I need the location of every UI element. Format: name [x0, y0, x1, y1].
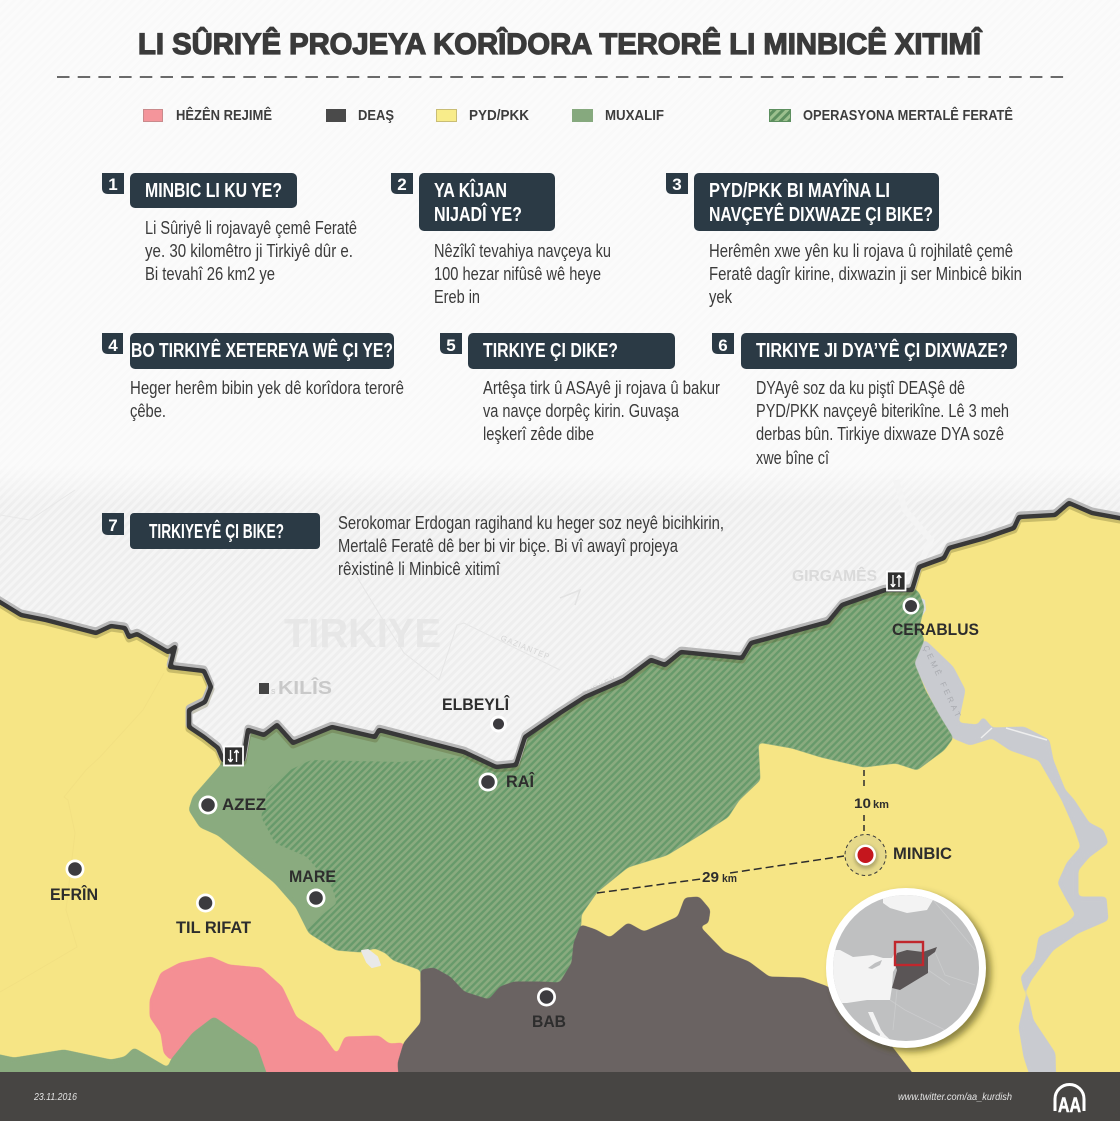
- lake patch: [362, 950, 380, 967]
- legend: PYD/PKK: PYD/PKK: [469, 107, 529, 124]
- number badge 3: 3: [672, 175, 682, 194]
- text 3: yek: [709, 287, 733, 307]
- number badge 7: 7: [108, 516, 118, 535]
- text 6: [756, 378, 1009, 468]
- Turkey road label: TURKEY: [581, 674, 618, 699]
- text 7: Mertalê Feratê dê ber bi vir biçe. Bi vî awayî projeya: [338, 536, 679, 556]
- date: 23.11.2016: [33, 1092, 77, 1103]
- panel: question 5: [440, 333, 720, 444]
- panel: question 4: [102, 333, 404, 421]
- city: Elbeylî: [442, 695, 510, 732]
- text 5: Artêşa tirk û ASAyê ji rojava û bakur: [483, 378, 720, 398]
- icon: border crossing east: [887, 572, 906, 590]
- number badge 2: 2: [397, 175, 407, 194]
- distance: 29 km: [597, 856, 844, 893]
- heading 6: TIRKIYE JI DYA’YÊ ÇI DIXWAZE?: [756, 338, 1008, 362]
- city: Minbic marker: [845, 834, 952, 876]
- faint roads in Turkey: [2, 490, 581, 679]
- Girgamês label: GIRGAMÊS: [792, 566, 877, 585]
- number badge 1: [102, 173, 124, 194]
- distance: 10 km: 10: [854, 795, 871, 811]
- text 6: xwe bîne cî: [756, 448, 830, 468]
- text 3: Herêmên xwe yên ku li rojava û rojhilatê çemê: [709, 241, 1013, 261]
- number badge 3: [666, 173, 688, 194]
- heading 1: [130, 173, 297, 208]
- panel: question 1: [102, 173, 357, 284]
- text 1: ye. 30 kilomêtro ji Tirkiyê dûr e.: [145, 241, 353, 261]
- Kilis label: [259, 677, 332, 694]
- city: Efrîn: EFRÎN: [50, 885, 98, 904]
- icon: border crossing west: [224, 746, 243, 766]
- city: Cerablus: CERABLUS: [892, 620, 979, 639]
- map: [0, 490, 1120, 1072]
- logo: AA: [1055, 1084, 1084, 1117]
- number badge 1: 1: [108, 175, 118, 194]
- text 4: çêbe.: [130, 401, 166, 421]
- distance: 29 km: 29: [702, 869, 719, 886]
- city: Mare: [290, 870, 336, 908]
- heading 4: [130, 333, 394, 369]
- territory: DEAŞ: [398, 896, 912, 1072]
- legend: regime forces: HÊZÊN REJIMÊ: [176, 106, 272, 124]
- inset red locator box: [895, 942, 923, 965]
- territory: opposition green: [189, 587, 953, 1003]
- Kilis label: KILÎS: [278, 677, 332, 698]
- text 1: Li Sûriyê li rojavayê çemê Feratê: [145, 218, 357, 238]
- text 5: [483, 378, 720, 444]
- logo: AA: AA: [1058, 1094, 1081, 1117]
- distance: 10 km: km: [873, 799, 889, 811]
- panel: question 7: [102, 513, 724, 579]
- territory: opposition southwest: [0, 1018, 266, 1072]
- distance: 10 km: [854, 770, 889, 833]
- heading 5: [468, 333, 675, 369]
- heading 2: NIJADÎ YE?: [434, 202, 522, 226]
- number badge 4: 4: [108, 336, 118, 355]
- legend: [144, 106, 1013, 124]
- inset seas: [833, 895, 933, 1039]
- legend: regime forces: [144, 106, 272, 124]
- Turkey label: TIRKIYE: [284, 610, 441, 656]
- heading 1: MINBIC LI KU YE?: [145, 180, 282, 202]
- city: Til Rifat: TIL RIFAT: [176, 918, 252, 937]
- text 6: derbas bûn. Tirkiye dixwaze DYA sozê: [756, 424, 1004, 444]
- text 5: va navçe dorpêç kirin. Guvaşa: [483, 401, 680, 421]
- city: Til Rifat: [176, 894, 252, 937]
- legend: Euphrates Shield operation: OPERASYONA MERTALÊ FERATÊ: [803, 106, 1013, 124]
- legend: DEAŞ: DEAŞ: [358, 107, 394, 124]
- locator map inset: [825, 885, 991, 1052]
- number badge 7: [102, 513, 124, 535]
- city: Mare: MARE: [289, 867, 336, 886]
- text 3: Feratê dagîr kirine, dixwazin ji ser Minbicê bikin: [709, 264, 1022, 284]
- text 7: rêxistinê li Minbicê xitimî: [338, 559, 501, 579]
- heading 2: YA KÎJAN: [434, 178, 507, 202]
- text 4: Heger herêm bibin yek dê korîdora terorê: [130, 378, 404, 398]
- heading 5: TIRKIYE ÇI DIKE?: [483, 340, 618, 362]
- panel: question 2: [391, 173, 611, 307]
- distance: 29 km: km: [722, 873, 737, 885]
- heading 7: [130, 513, 320, 549]
- faint tracks on yellow: [0, 673, 164, 992]
- city: Elbeylî: ELBEYLÎ: [442, 695, 510, 714]
- territory: Euphrates river: [914, 597, 1108, 1090]
- title: LI SÛRIYÊ PROJEYA KORÎDORA TERORÊ LI MINBICÊ XITIMÎ: [138, 27, 983, 61]
- city: Raî: [478, 772, 535, 792]
- inset faint borders: [890, 900, 975, 1040]
- twitter link: www.twitter.com/aa_kurdish: [898, 1092, 1012, 1103]
- text 6: PYD/PKK navçeyê biterikîne. Lê 3 meh: [756, 401, 1009, 421]
- text 2: Nêzîkî tevahiya navçeya ku: [434, 241, 611, 261]
- territory: PYD/PKK yellow: [0, 503, 1120, 1072]
- heading 7: TIRKIYEYÊ ÇI BIKE?: [149, 519, 284, 543]
- Gaziantep road label: GAZIANTEP: [499, 634, 551, 662]
- heading 3: [694, 173, 939, 231]
- Kilis label: s: [271, 686, 276, 696]
- panel: question 6: [712, 333, 1017, 468]
- text 4: [130, 378, 404, 421]
- heading 4: BO TIRKIYÊ XETEREYA WÊ ÇI YE?: [131, 338, 393, 362]
- number badge 6: [712, 333, 734, 355]
- heading 2: [419, 173, 555, 231]
- city: Efrîn: [51, 860, 97, 900]
- legend: opposition: [572, 107, 664, 124]
- heading 6: [741, 333, 1017, 369]
- city: Azez: [198, 795, 266, 814]
- number badge 5: [440, 333, 462, 355]
- footer: [0, 1072, 1120, 1121]
- text 1: Bi tevahî 26 km2 ye: [145, 264, 275, 284]
- river label: ÇEMÊ FERAT: [921, 644, 964, 721]
- text 1: [145, 218, 357, 284]
- text 7: Serokomar Erdogan ragihand ku heger soz neyê bicihkirin,: [338, 513, 724, 533]
- number badge 6: 6: [718, 336, 728, 355]
- text 7: [338, 513, 724, 579]
- border of Turkey and Syria: [0, 501, 1120, 769]
- city: Minbic marker: MINBIC: [893, 844, 952, 863]
- panel: question 3: [666, 173, 1022, 307]
- legend: PYD/PKK: [436, 107, 529, 124]
- text 2: Ereb in: [434, 287, 480, 307]
- legend: DEAŞ: [326, 107, 394, 124]
- city: Bab: BAB: [532, 1012, 566, 1031]
- text 2: [434, 241, 611, 307]
- territory: Euphrates Shield hatch: [262, 590, 952, 998]
- number badge 5: 5: [446, 336, 456, 355]
- city: Azez: AZEZ: [222, 795, 266, 814]
- number badge 4: [102, 333, 123, 355]
- city: Raî: RAÎ: [506, 772, 535, 791]
- inset Cyprus: [868, 960, 882, 969]
- city: Cerablus: [892, 598, 978, 635]
- text 6: DYAyê soz da ku piştî DEAŞê dê: [756, 378, 965, 398]
- text 3: [709, 241, 1022, 307]
- text 2: 100 hezar nifûsê wê heye: [434, 264, 601, 284]
- legend: opposition: MUXALIF: [605, 107, 664, 124]
- text 5: leşkerî zêde dibe: [483, 424, 594, 444]
- heading 3: PYD/PKK BI MAYÎNA LI: [709, 178, 890, 202]
- territory: regime pink: [149, 956, 404, 1072]
- number badge 2: [391, 173, 413, 194]
- city: Bab: [533, 988, 566, 1027]
- heading 3: NAVÇEYÊ DIXWAZE ÇI BIKE?: [709, 202, 933, 226]
- inset Syria: [892, 947, 937, 990]
